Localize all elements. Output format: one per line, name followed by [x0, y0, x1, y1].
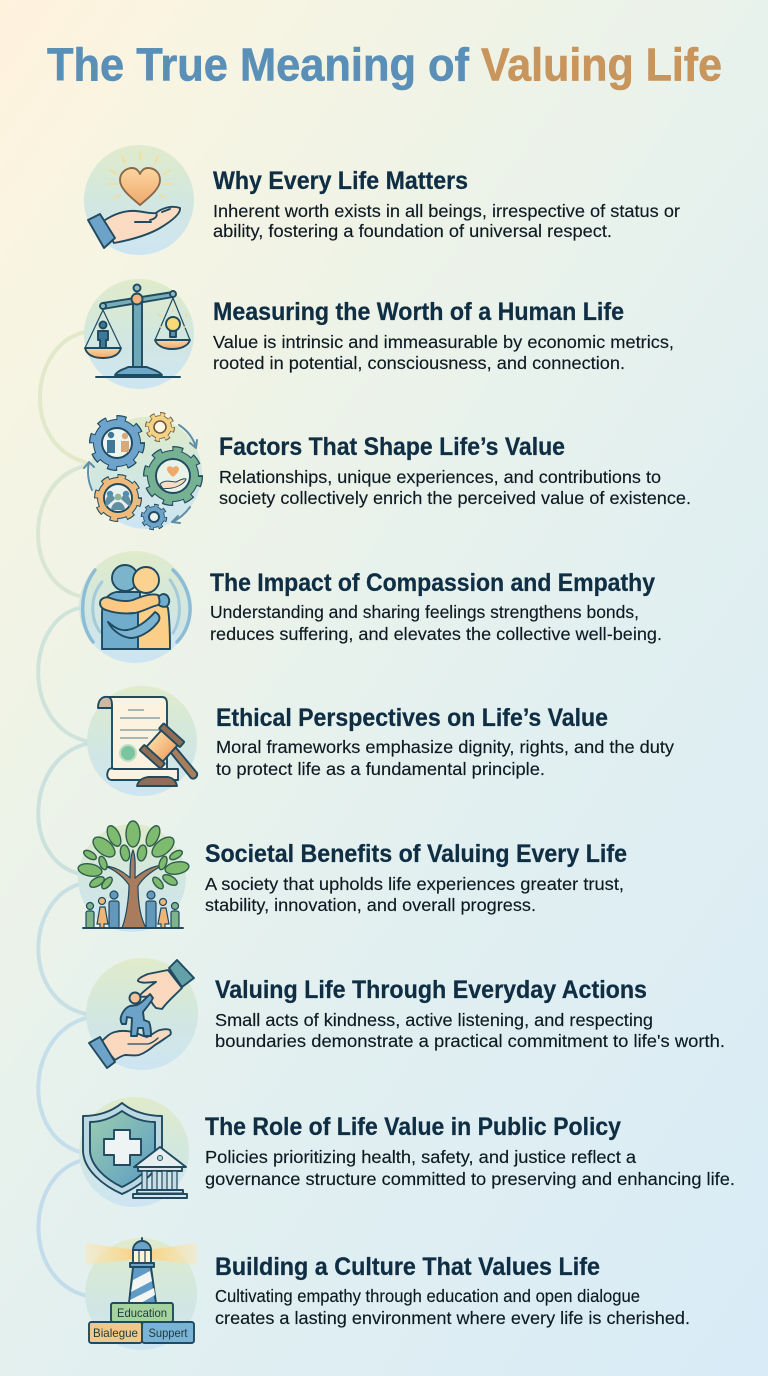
description [205, 874, 624, 915]
description: Value is intrinsic and immeasurable by economic metrics, [213, 332, 674, 352]
description [205, 1147, 735, 1189]
item 9: building a culture [85, 1238, 690, 1350]
description: creates a lasting environment where every life is cherished. [215, 1308, 690, 1328]
icon: balance scale [84, 279, 194, 389]
connector curves [38, 332, 87, 1296]
description [210, 602, 662, 644]
blue gear [93, 419, 141, 467]
heading: Why Every Life Matters [213, 167, 468, 195]
icon: tree with people [77, 821, 190, 932]
item 7: everyday actions [86, 958, 725, 1070]
icon: heart over open hand [84, 145, 194, 255]
description: Policies prioritizing health, safety, and justice reflect a [205, 1147, 636, 1167]
description [213, 201, 680, 241]
description: Understanding and sharing feelings strengthens bonds, [210, 602, 639, 622]
description [213, 332, 674, 373]
small yellow gear [148, 415, 172, 439]
description: Inherent worth exists in all beings, irrespective of status or [213, 201, 680, 221]
description: governance structure committed to preserving and enhancing life. [205, 1169, 735, 1189]
item 4: compassion and empathy [79, 551, 662, 663]
icon: shield and government building [79, 1097, 189, 1207]
label block: Bialegue: Bialegue [93, 1326, 138, 1340]
description: society collectively enrich the perceived value of existence. [219, 488, 691, 508]
item 1: why every life matters [84, 145, 680, 255]
description: stability, innovation, and overall progress. [205, 895, 536, 915]
item 8: public policy [79, 1097, 735, 1207]
description: Relationships, unique experiences, and contributions to [219, 467, 661, 487]
description: Cultivating empathy through education and open dialogue [215, 1286, 640, 1306]
title [47, 38, 722, 90]
description: boundaries demonstrate a practical commitment to life's worth. [215, 1031, 725, 1051]
heading: Measuring the Worth of a Human Life [213, 298, 624, 326]
icon: gears with people [84, 415, 202, 529]
item 5: ethical perspectives [87, 686, 674, 796]
heading: Ethical Perspectives on Life’s Value [216, 704, 608, 732]
description: to protect life as a fundamental principle. [216, 759, 545, 779]
green gear [147, 450, 199, 502]
heading: Building a Culture That Values Life [215, 1253, 600, 1281]
description: ability, fostering a foundation of universal respect. [213, 221, 612, 241]
heading: Valuing Life Through Everyday Actions [215, 976, 647, 1004]
title: The True Meaning of [47, 38, 470, 90]
icon: two people hugging [79, 551, 191, 663]
cycle arrows [84, 425, 197, 523]
heading: Factors That Shape Life’s Value [219, 433, 565, 461]
icon: scroll and gavel [87, 686, 197, 796]
orange gear [97, 477, 139, 519]
icon: hands lifting a figure [86, 958, 198, 1070]
heading: The Impact of Compassion and Empathy [210, 569, 655, 597]
description [219, 467, 691, 508]
item 2: measuring the worth [84, 279, 674, 389]
description: rooted in potential, consciousness, and connection. [213, 353, 625, 373]
icon: lighthouse on labelled blocks [85, 1238, 197, 1350]
description [216, 737, 674, 779]
title: Valuing Life [481, 38, 722, 90]
description: Moral frameworks emphasize dignity, rights, and the duty [216, 737, 674, 757]
small blue gear [143, 506, 165, 528]
description: A society that upholds life experiences greater trust, [205, 874, 624, 894]
item 6: societal benefits [77, 821, 627, 932]
heading: The Role of Life Value in Public Policy [205, 1113, 621, 1141]
item 3: factors that shape [84, 415, 691, 529]
description [215, 1010, 725, 1051]
description: reduces suffering, and elevates the collective well-being. [210, 624, 662, 644]
description: Small acts of kindness, active listening, and respecting [215, 1010, 653, 1030]
description [215, 1286, 690, 1328]
label block: Education: Education [117, 1306, 167, 1320]
label block: Suppert: Suppert [148, 1326, 188, 1340]
heading: Societal Benefits of Valuing Every Life [205, 840, 627, 868]
